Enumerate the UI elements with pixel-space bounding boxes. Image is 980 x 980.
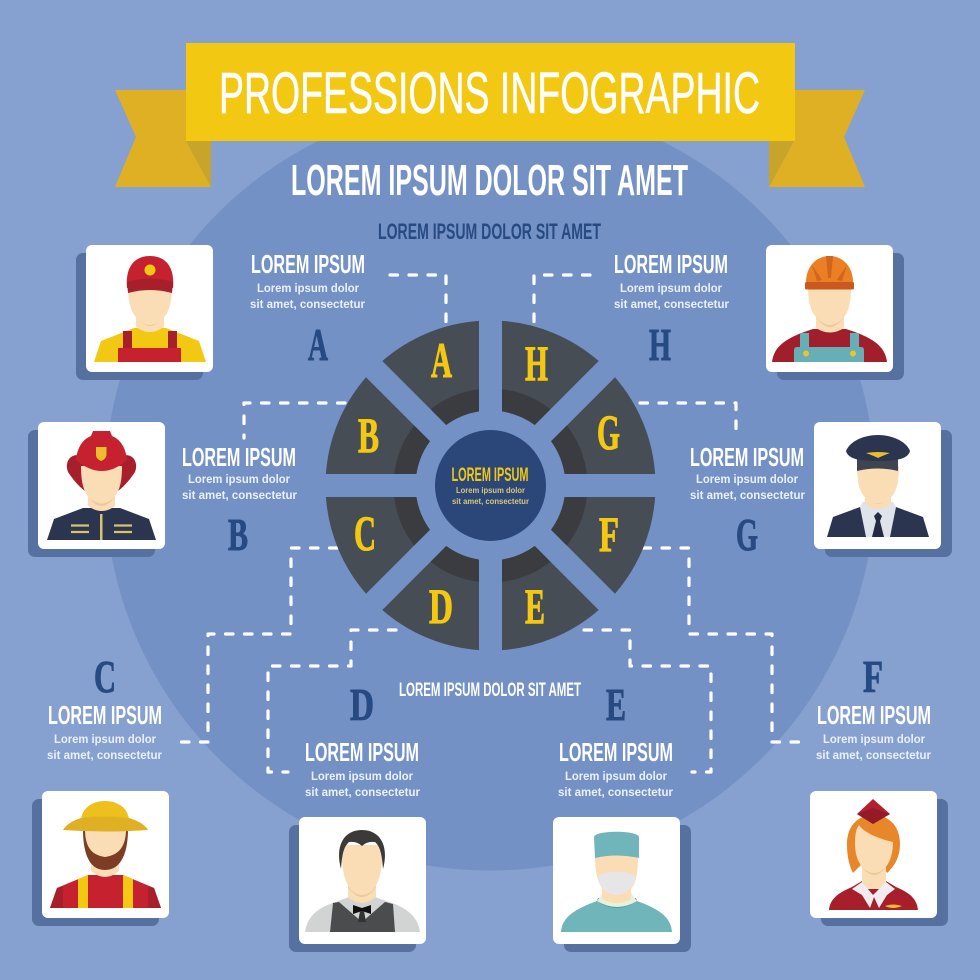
title banner — [115, 43, 865, 187]
label D — [305, 679, 421, 799]
label D: D — [350, 679, 374, 730]
label C: LOREM IPSUM — [48, 700, 162, 730]
segmented wheel: A — [431, 332, 452, 388]
card H: construction worker — [766, 245, 904, 380]
label E: sit amet, consectetur — [558, 787, 674, 799]
label D: Lorem ipsum dolor — [311, 771, 414, 783]
label G: G — [736, 509, 758, 560]
label G: sit amet, consectetur — [690, 490, 806, 502]
card B: firefighter — [28, 422, 165, 557]
wheel centre: sit amet, consectetur — [452, 496, 530, 506]
label A: sit amet, consectetur — [250, 299, 366, 311]
label C: C — [94, 651, 116, 702]
label E: Lorem ipsum dolor — [565, 771, 668, 783]
label F: F — [863, 651, 883, 702]
label F — [816, 651, 932, 762]
card A: mechanic — [76, 245, 213, 380]
label G: Lorem ipsum dolor — [696, 474, 799, 486]
label C — [47, 651, 163, 762]
label H: sit amet, consectetur — [614, 299, 730, 311]
label D: LOREM IPSUM — [305, 737, 419, 767]
label E: E — [606, 679, 626, 730]
label F: sit amet, consectetur — [816, 750, 932, 762]
segmented wheel: B — [358, 407, 379, 463]
subtitle: LOREM IPSUM DOLOR SIT AMET — [291, 156, 688, 205]
label H: Lorem ipsum dolor — [620, 283, 723, 295]
icon: flight attendant — [829, 799, 918, 910]
top caption: LOREM IPSUM DOLOR SIT AMET — [378, 219, 601, 244]
label G: LOREM IPSUM — [690, 442, 804, 472]
segmented wheel: E — [525, 578, 545, 634]
segmented wheel — [326, 321, 655, 650]
label H: H — [649, 319, 671, 370]
segmented wheel: G — [597, 404, 620, 460]
label H — [614, 249, 730, 370]
label A: Lorem ipsum dolor — [257, 283, 360, 295]
segmented wheel: F — [599, 506, 619, 562]
icon: construction worker — [772, 256, 887, 362]
label B: sit amet, consectetur — [182, 490, 298, 502]
label C: Lorem ipsum dolor — [54, 734, 157, 746]
large background circle — [105, 100, 875, 870]
wheel centre: Lorem ipsum dolor — [456, 485, 526, 495]
icon: farmer — [50, 801, 161, 908]
label A — [250, 249, 366, 370]
label G — [690, 442, 806, 560]
segmented wheel: C — [354, 505, 376, 561]
card G: pilot — [814, 422, 952, 557]
card F: flight attendant — [810, 791, 948, 926]
wheel centre: LOREM IPSUM — [452, 465, 528, 486]
label F: Lorem ipsum dolor — [823, 734, 926, 746]
segmented wheel: H — [525, 335, 548, 391]
label B — [182, 442, 298, 560]
label A: LOREM IPSUM — [251, 249, 365, 279]
segmented wheel: D — [429, 578, 453, 634]
label B: Lorem ipsum dolor — [188, 474, 291, 486]
label B: LOREM IPSUM — [182, 442, 296, 472]
label E — [558, 679, 674, 799]
label A: A — [308, 319, 328, 370]
icon: surgeon — [561, 832, 672, 932]
label H: LOREM IPSUM — [614, 249, 728, 279]
bottom caption: LOREM IPSUM DOLOR SIT AMET — [399, 680, 581, 701]
icon: waiter — [305, 830, 420, 932]
card D: waiter — [289, 817, 426, 952]
label B: B — [228, 509, 248, 560]
card E: surgeon — [553, 817, 691, 952]
icon: mechanic — [94, 256, 206, 362]
card C: farmer — [32, 791, 169, 926]
dashed connectors — [178, 275, 802, 772]
icon: firefighter — [47, 431, 156, 540]
label E: LOREM IPSUM — [559, 737, 673, 767]
label C: sit amet, consectetur — [47, 750, 163, 762]
icon: pilot — [827, 435, 929, 537]
label D: sit amet, consectetur — [305, 787, 421, 799]
wheel centre — [435, 430, 546, 541]
